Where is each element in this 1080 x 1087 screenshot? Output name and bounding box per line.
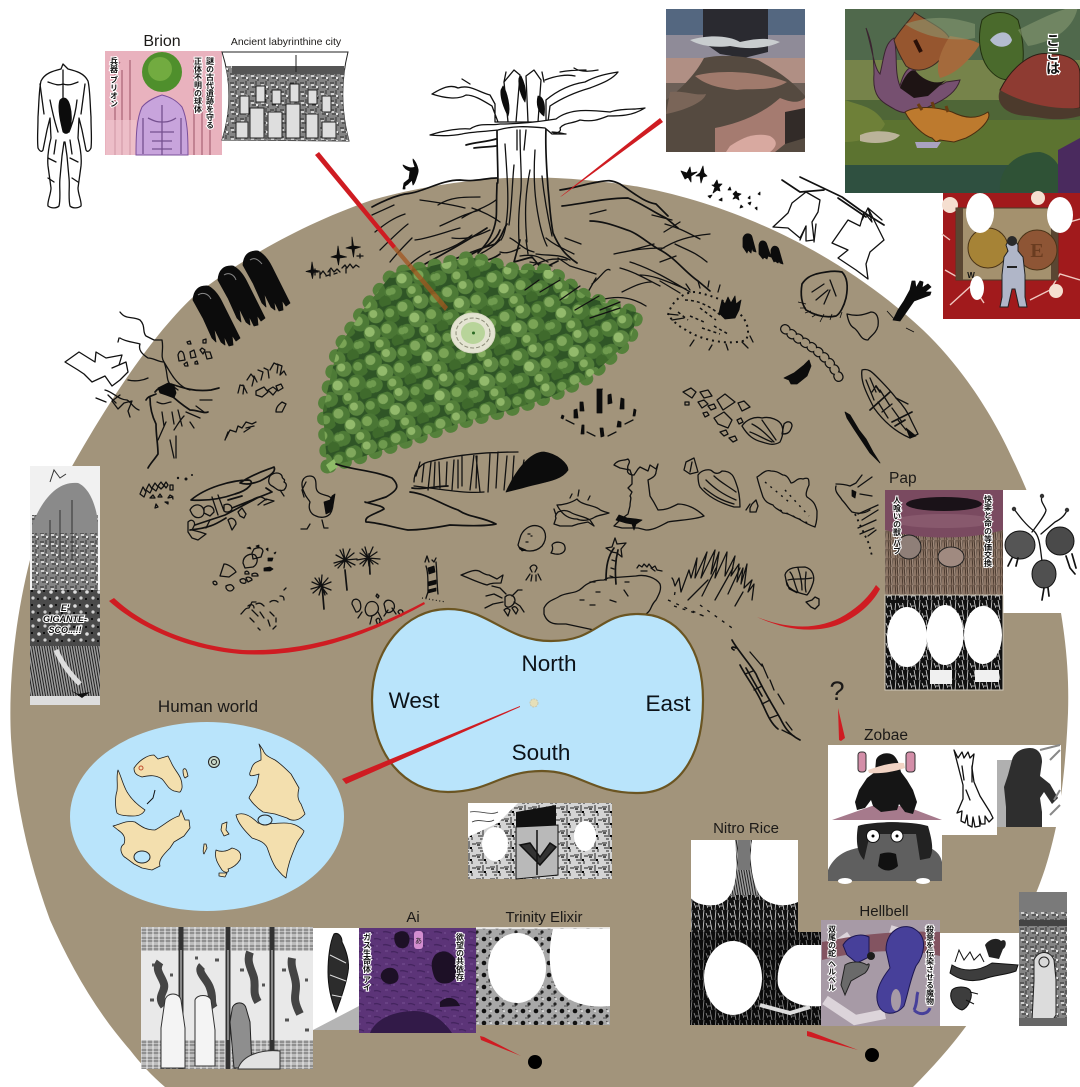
label: Ancient labyrinthine city: Ancient labyrinthine city: [231, 36, 342, 48]
label: Hellbell: [859, 903, 909, 920]
panel: door with speech bubbles: [468, 803, 612, 879]
icon: pair of small spiky creatures: [554, 490, 609, 526]
small bubble: [414, 931, 423, 949]
manga panel: temple: [1019, 892, 1067, 1026]
icon: ruins and mountain: [225, 363, 286, 440]
hooded figure crouching: [832, 806, 942, 820]
label: West: West: [389, 688, 440, 713]
icon: canyon rift: [732, 640, 800, 740]
panel: Pap group: [885, 470, 1080, 690]
icon: spiky cliff with pond: [798, 271, 878, 340]
painting: black tower on pink mountain: [666, 9, 805, 152]
icon: rock clusters: [178, 339, 212, 366]
forest: [323, 257, 638, 472]
icon: lumpy rock outcrop: [757, 471, 817, 527]
manga panel top: [885, 490, 1003, 595]
cut-in specimen: [313, 928, 359, 1030]
label: Pap: Pap: [889, 470, 917, 487]
red pointer: tree to painting: [560, 118, 663, 197]
bushes and ground: [845, 100, 885, 142]
panel: labyrinth city: [222, 52, 350, 141]
stern bearded face: [828, 820, 942, 881]
caption: SCO...!!: [48, 625, 82, 635]
panel: red lightning coins: E: [1030, 240, 1044, 262]
panel: red lightning coins: [942, 191, 1080, 319]
icon: headless giant figure: [38, 64, 91, 208]
icon: spider creature: [485, 586, 524, 616]
lake: Dark Continent inner sea: [372, 609, 703, 793]
icon: three hooded figures: [743, 234, 783, 264]
red pointer and black marker, Ai: [480, 1036, 542, 1069]
panel: Zobae group: [828, 727, 1061, 884]
icon: rock clusters and giant fungi, left: [140, 467, 286, 540]
cave: [414, 452, 524, 492]
orange dinosaur: [905, 108, 989, 142]
ancient labyrinth ring: [451, 313, 495, 353]
label: South: South: [512, 740, 570, 765]
red arc: ground to Pap: [757, 585, 880, 630]
icon: star plants and scattered shrubs: [306, 237, 363, 278]
caption: GIGANTE-: [43, 614, 87, 624]
icon: crater ring: [660, 281, 753, 350]
icon: three palm trees: [311, 547, 380, 609]
mountain ridges around the tree: [372, 178, 710, 306]
icon: long-necked spiked creature: [614, 459, 704, 530]
icon: black spear blade: [845, 412, 880, 463]
icon: tall grass: [668, 550, 754, 630]
icon: small monkey creature on ridge: [403, 159, 418, 189]
boy figure: [1000, 241, 1027, 307]
label: Human world: [158, 697, 258, 716]
green beetle: [980, 12, 1023, 80]
speech bubbles: [966, 193, 994, 233]
icon: gnarled volcano root: [108, 378, 219, 468]
question mark: ?: [829, 676, 845, 706]
icon: boulder with small boulder: [518, 526, 565, 554]
icon: tiny island: [530, 699, 538, 707]
manga panel bottom: [885, 595, 1003, 690]
icon: dodo bird: [301, 476, 335, 529]
icon: grassy island with star tower: [544, 538, 662, 630]
panel: Brion card: 兵器 ブリオン: [110, 56, 118, 107]
label: Nitro Rice: [713, 820, 779, 837]
panel: Ai: あ: [415, 937, 422, 945]
river and cave: [336, 452, 568, 530]
panel: Human world map: [70, 697, 344, 911]
label: Trinity Elixir: [506, 909, 582, 926]
label: North: North: [521, 651, 577, 676]
icon: reaching black hand: [887, 281, 931, 332]
trunk: [497, 123, 547, 178]
panel: Trinity Elixir: [476, 909, 610, 1025]
icon: flock of birds: [681, 166, 760, 210]
red wedge: [838, 708, 845, 741]
severed hand: [954, 750, 993, 827]
label: Zobae: [864, 727, 908, 744]
red pointer: city to forest centre: [315, 152, 448, 311]
icon: rock wall and dark ridge: [784, 329, 841, 384]
white backing and spores: [1003, 490, 1080, 613]
captions: 殺意を伝染させる魔物: [926, 924, 934, 1006]
panel: Hellbell group: [821, 892, 1067, 1026]
continent islands: [134, 755, 182, 792]
panel: red lightning coins: W: [967, 271, 975, 280]
icon: green sphere: [142, 52, 182, 92]
captions: 快楽と命の等価交換: [984, 494, 992, 568]
label: East: East: [645, 691, 691, 716]
tree: [430, 68, 645, 263]
icon: small octopus: [526, 565, 541, 581]
panel: question mark pointer: [829, 676, 845, 741]
icon: shell rock: [785, 567, 819, 609]
panel: Pap group: 人喰いの獣 パプ: [892, 496, 902, 554]
ring cloud band: [430, 108, 645, 136]
icon: wrecked flying ship: [862, 369, 918, 438]
icon: ribbed clam rocks: [684, 458, 758, 512]
panel: Brion card: [105, 51, 222, 155]
icon: lightning creature, top right: [773, 177, 884, 279]
panel: Hellbell group: 双尾の蛇 ヘルベル: [828, 925, 836, 991]
icon: crawlers near lake: [352, 594, 403, 626]
red shell creature: [1000, 53, 1080, 110]
purple torso: [136, 95, 188, 155]
purple plant monster: [866, 28, 960, 113]
panel: Nitro Rice: [690, 820, 821, 1025]
icon: ruined pillars: [561, 389, 636, 437]
lower black panel: [690, 932, 821, 1025]
panel: Ai: [359, 909, 476, 1033]
icon: white lightning tree, upper left: [65, 312, 190, 410]
red pointer and black marker, Hellbell: [807, 1031, 879, 1062]
caption: E': [61, 603, 70, 613]
Japanese caption: ここは: [1045, 33, 1061, 75]
top illustrations: [38, 6, 1080, 319]
upper crown: [432, 70, 618, 122]
icon: mushroom mounds: [213, 545, 276, 591]
painting: monster jungle: [845, 6, 1080, 193]
red arc: giant panel to termite area: [109, 598, 425, 655]
label: Brion: Brion: [143, 33, 181, 50]
captions: 謎の古代遺跡を守る: [206, 56, 214, 129]
label: Ai: [406, 909, 420, 926]
panel: Brion card: 正体不明の球体: [194, 57, 202, 114]
captions: 欲望の共依存: [456, 932, 464, 981]
icon: bird shaped rock: [461, 570, 503, 585]
panel: Ai: ガス生命体 アイ: [362, 932, 372, 991]
icon: mound swarm: [683, 388, 792, 444]
icon: three black hooded giants: [193, 251, 290, 346]
panel: giant crowd manga strip: [30, 466, 100, 705]
icon: three walking bulbs: [1005, 494, 1076, 600]
icon: grass tufts: [241, 588, 286, 630]
red pointer: lake to human world: [342, 706, 520, 784]
icon: termite tower: [422, 556, 446, 602]
icon: horned skull: [836, 475, 878, 556]
white panel with creature nest: [940, 933, 1019, 1026]
panel: specimen tubes: [141, 927, 359, 1069]
dark giant figure: [997, 745, 1061, 827]
